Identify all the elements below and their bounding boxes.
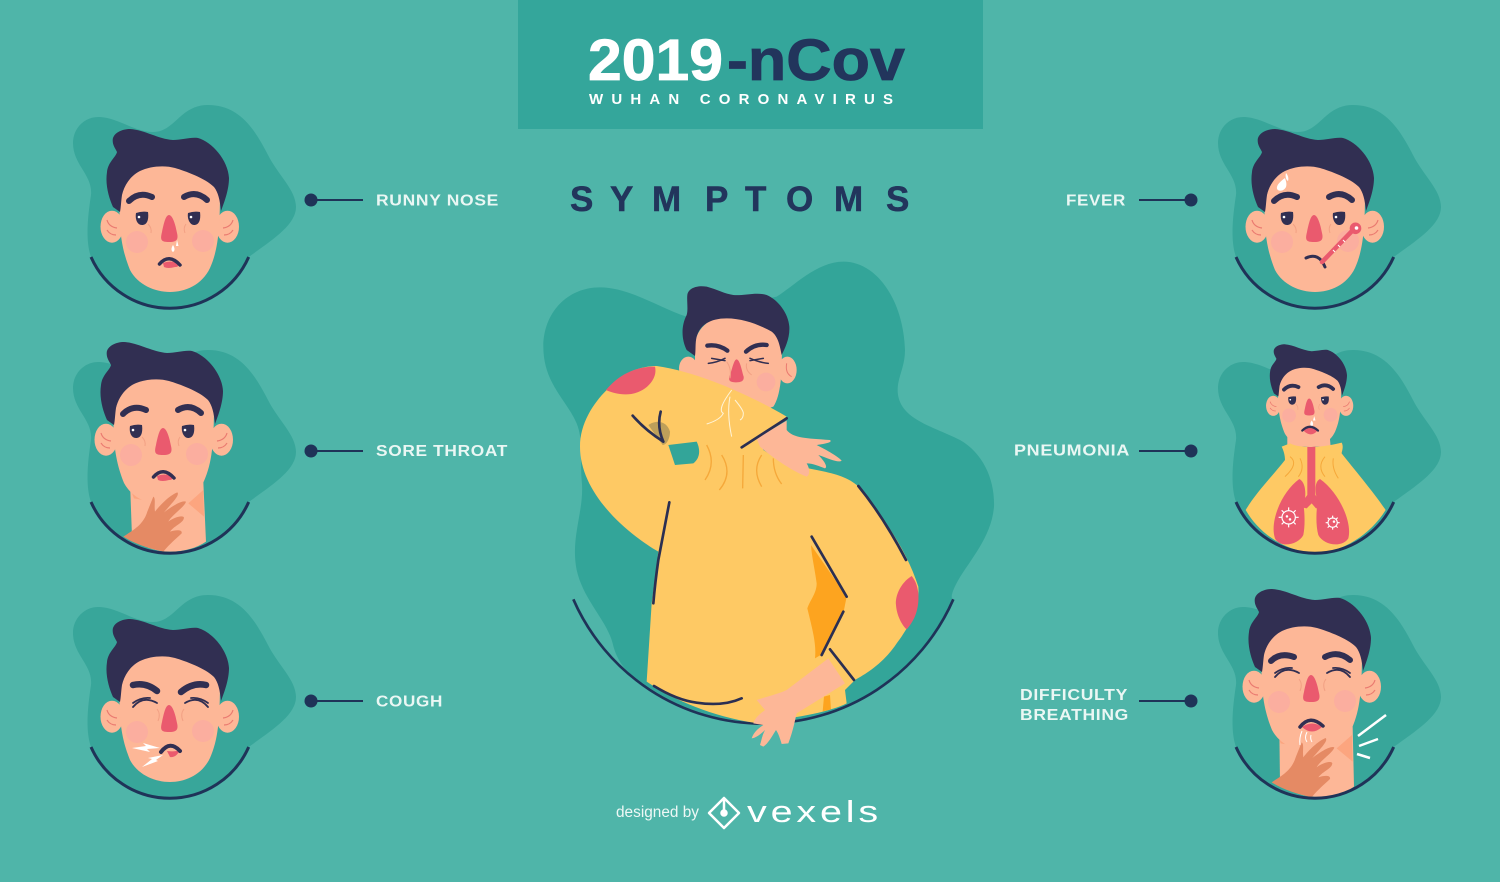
label: cough: COUGH — [376, 694, 443, 710]
connector: runny nose — [304, 194, 363, 206]
sweater — [580, 366, 918, 723]
sad mouth — [1306, 256, 1325, 267]
icon: thermometer — [1322, 222, 1361, 262]
label: runny nose: RUNNY NOSE — [376, 192, 499, 210]
icon: breath wisps — [1300, 731, 1312, 745]
icon: virus small — [1326, 516, 1340, 530]
neck — [130, 482, 206, 552]
connector: cough — [304, 694, 363, 708]
panel: pneumonia — [1218, 344, 1441, 553]
central figure: coughing man — [543, 262, 994, 747]
arc — [573, 599, 953, 724]
sweater creases — [705, 445, 782, 490]
label: fever: FEVER — [1066, 192, 1126, 210]
orange shadow — [807, 545, 847, 711]
lower hand — [752, 658, 845, 747]
icon: nose drip — [172, 240, 178, 252]
title: 2019-nCov: 2019 — [588, 28, 723, 93]
olive patch — [648, 422, 670, 445]
subtitle: WUHAN CORONAVIRUS — [589, 91, 893, 108]
neck — [1287, 425, 1331, 447]
connector: pneumonia — [1139, 444, 1198, 458]
label: pneumonia: PNEUMONIA — [1014, 442, 1130, 460]
lungs — [1274, 447, 1349, 544]
icon: hand on throat — [1272, 738, 1334, 797]
icon: wheeze lines — [1357, 715, 1386, 758]
angry brows — [133, 684, 206, 692]
panel: cough — [73, 595, 296, 798]
label: difficulty breathing — [1020, 687, 1129, 724]
panel: runny nose — [73, 105, 296, 308]
upper hand — [757, 421, 842, 477]
label: difficulty breathing: BREATHING — [1020, 707, 1129, 724]
breath wisps — [707, 390, 743, 437]
title: 2019-nCov: -nCov — [727, 28, 905, 93]
panel: sore throat — [73, 342, 296, 553]
central blob — [543, 262, 994, 722]
heading: symptoms: SYMPTOMS — [570, 180, 909, 219]
icon: sweat — [1277, 173, 1288, 191]
mouth — [161, 746, 180, 757]
icon: vexels diamond — [709, 798, 739, 828]
panel: fever — [1218, 105, 1441, 308]
connector: fever — [1139, 194, 1198, 206]
title: 2019-nCov — [588, 28, 905, 93]
armpit gap — [668, 442, 699, 465]
panel: difficulty breathing — [1218, 589, 1441, 798]
icon: hand on throat — [123, 492, 186, 552]
head — [679, 286, 797, 410]
red elbow patches — [606, 367, 918, 629]
title banner — [518, 0, 983, 129]
outlines — [633, 412, 906, 704]
label: sore throat: SORE THROAT — [376, 443, 508, 460]
connector: sore throat — [304, 444, 363, 458]
connector: difficulty breathing — [1139, 694, 1198, 708]
credit: vexels: vexels — [747, 794, 882, 829]
label: difficulty breathing: DIFFICULTY — [1020, 687, 1128, 704]
mouth — [160, 259, 180, 268]
icon: virus large — [1279, 507, 1299, 527]
icon: cough burst — [132, 743, 163, 767]
credit: designed by: designed by — [616, 804, 699, 821]
sweater — [1246, 443, 1386, 553]
